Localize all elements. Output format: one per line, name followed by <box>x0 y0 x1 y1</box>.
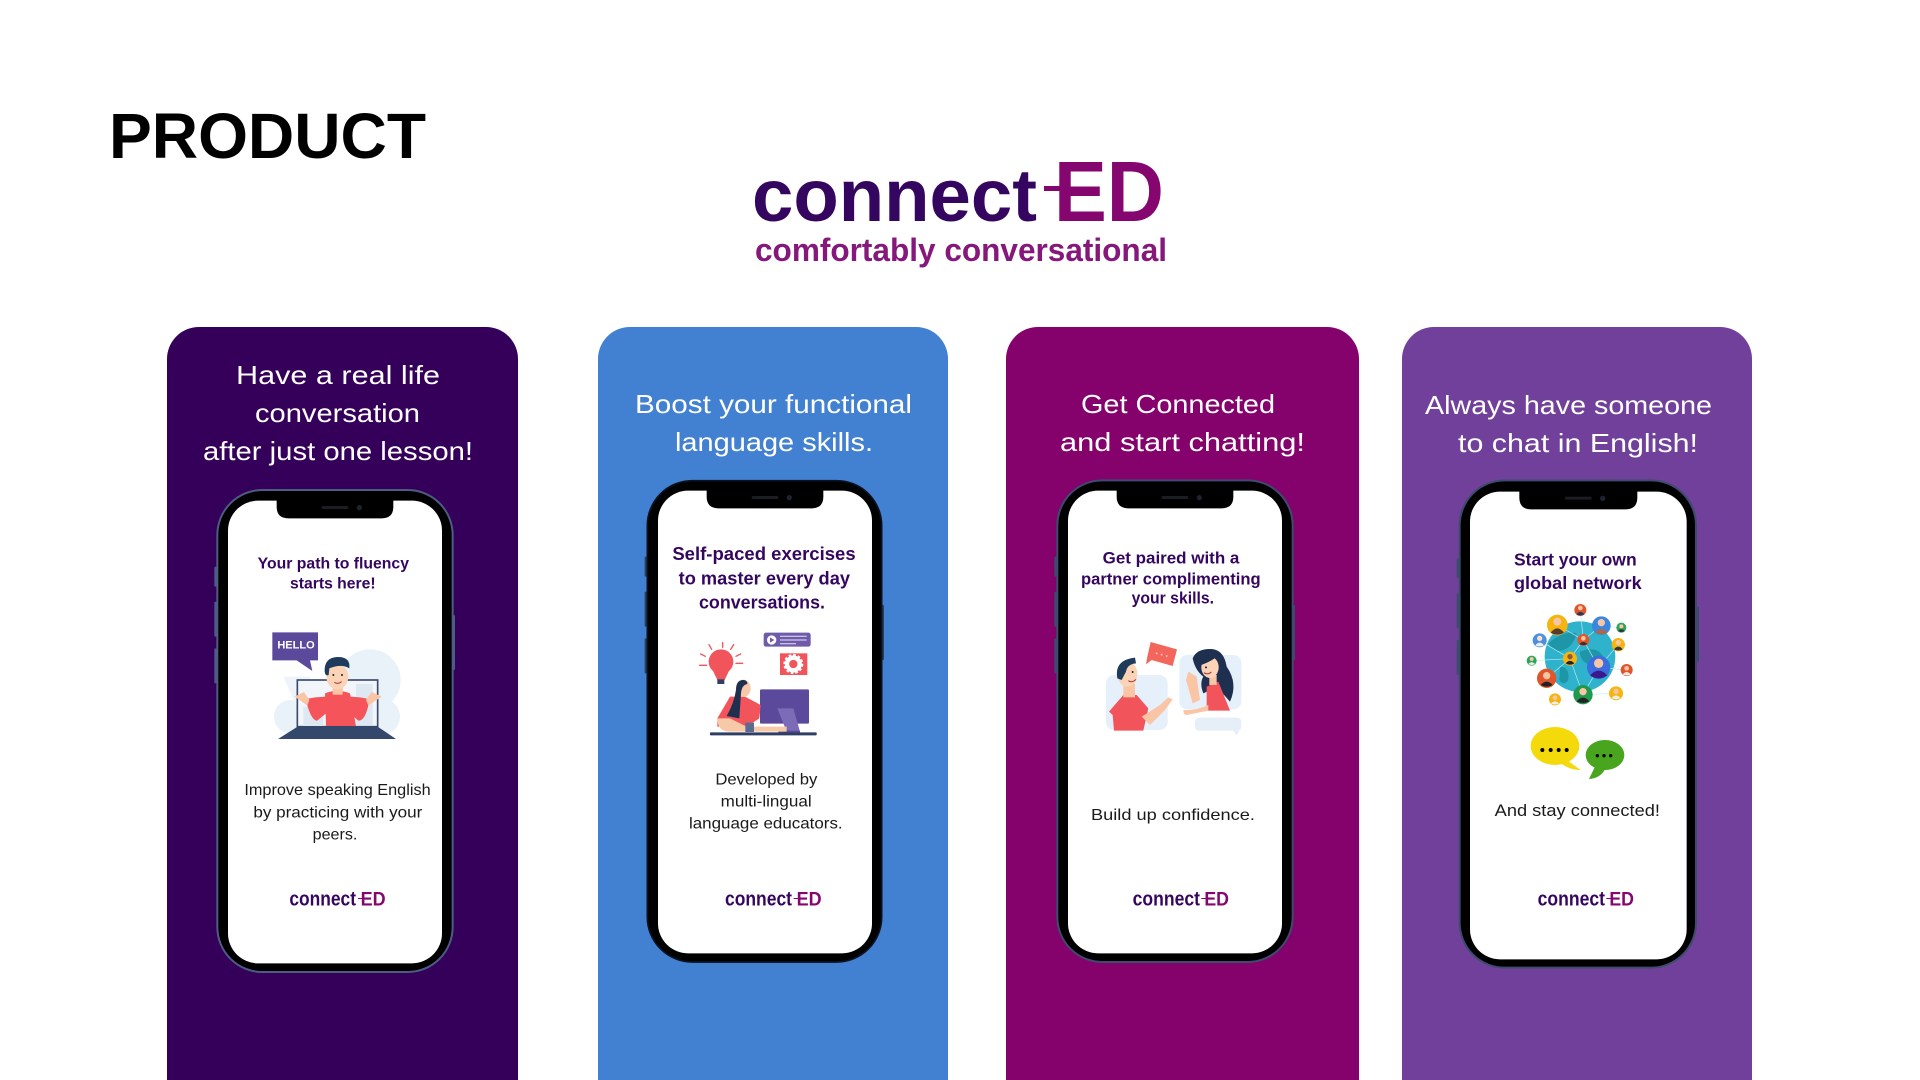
phone 1 logo: ED <box>361 890 386 911</box>
illustration: man on laptop saying hello: HELLO <box>277 640 315 652</box>
phone 1 heading <box>258 555 409 592</box>
phone 4 heading: Start your own <box>1514 550 1637 570</box>
phone 4 body text: And stay connected! <box>1495 801 1660 820</box>
heading: card 1 <box>203 360 473 466</box>
panel: real life conversation <box>167 327 518 1080</box>
panel: get connected <box>1006 327 1359 1080</box>
phone 4 logo: connect <box>1538 888 1605 911</box>
title: PRODUCT <box>109 100 426 172</box>
phone 3 heading <box>1081 548 1261 607</box>
heading: card 2: language skills. <box>675 427 873 457</box>
phone 1 body text: by practicing with your <box>253 804 423 821</box>
panel: always someone to chat <box>1402 327 1752 1080</box>
phone 4 <box>1457 480 1699 968</box>
heading: card 3 <box>1060 389 1305 457</box>
illustration: global network of people <box>1527 604 1633 705</box>
heading: card 1: conversation <box>255 398 420 428</box>
heading: card 2: Boost your functional <box>635 389 912 419</box>
logo: connectED with tagline <box>752 145 1167 268</box>
phone 3 heading: Get paired with a <box>1103 548 1240 567</box>
heading: card 4: Always have someone <box>1425 390 1712 420</box>
heading: card 3: Get Connected <box>1081 389 1275 419</box>
phone 3 body text: Build up confidence. <box>1091 807 1255 824</box>
phone 4 heading: global network <box>1514 573 1643 593</box>
phone 2 logo: connect <box>725 888 792 911</box>
illustration: man on laptop saying hello <box>272 632 401 739</box>
phone 3 logo: ED <box>1204 890 1229 911</box>
phone 2 heading: to master every day <box>679 567 851 588</box>
icon: yellow and green chat bubbles <box>1531 727 1624 779</box>
phone 2 body text: Developed by <box>715 771 817 788</box>
logo: connectED with tagline: connect <box>752 154 1037 237</box>
logo: connectED with tagline: ED <box>1054 145 1164 240</box>
phone 1 body text: Improve speaking English <box>244 782 431 799</box>
phone 1 heading: starts here! <box>290 575 376 592</box>
phone 2 heading <box>672 543 856 612</box>
phone 1 body text <box>244 782 431 843</box>
phone 2 body text: language educators. <box>689 815 843 832</box>
illustration: woman at computer with light bulb <box>700 633 817 735</box>
phone 2 <box>645 481 884 962</box>
phone 1 <box>214 490 455 972</box>
logo: connectED with tagline: comfortably conversational <box>755 232 1167 268</box>
phone 4 logo: ED <box>1609 890 1634 911</box>
panel: functional language skills <box>598 327 948 1080</box>
heading: card 4 <box>1425 390 1712 458</box>
illustration: man and woman chatting <box>1106 642 1241 735</box>
phone 4 heading <box>1514 550 1643 593</box>
phone 2 body text <box>689 771 843 832</box>
phone 3 logo: connect <box>1133 888 1200 911</box>
heading: card 3: and start chatting! <box>1060 427 1305 457</box>
phone 3 <box>1054 480 1295 962</box>
phone 3 heading: partner complimenting <box>1081 569 1261 588</box>
phone 2 heading: Self-paced exercises <box>672 543 856 564</box>
phone 1 body text: peers. <box>313 826 357 843</box>
phone 2 logo: ED <box>797 890 822 911</box>
phone 1 heading: Your path to fluency <box>258 555 409 572</box>
phone 3 heading: your skills. <box>1132 588 1214 607</box>
phone 2 heading: conversations. <box>699 591 825 612</box>
heading: card 2 <box>635 389 912 457</box>
heading: card 4: to chat in English! <box>1458 428 1698 458</box>
heading: card 1: Have a real life <box>236 360 440 390</box>
phone 1 logo: connect <box>289 888 356 911</box>
phone 2 body text: multi-lingual <box>721 794 812 811</box>
heading: card 1: after just one lesson! <box>203 436 473 466</box>
